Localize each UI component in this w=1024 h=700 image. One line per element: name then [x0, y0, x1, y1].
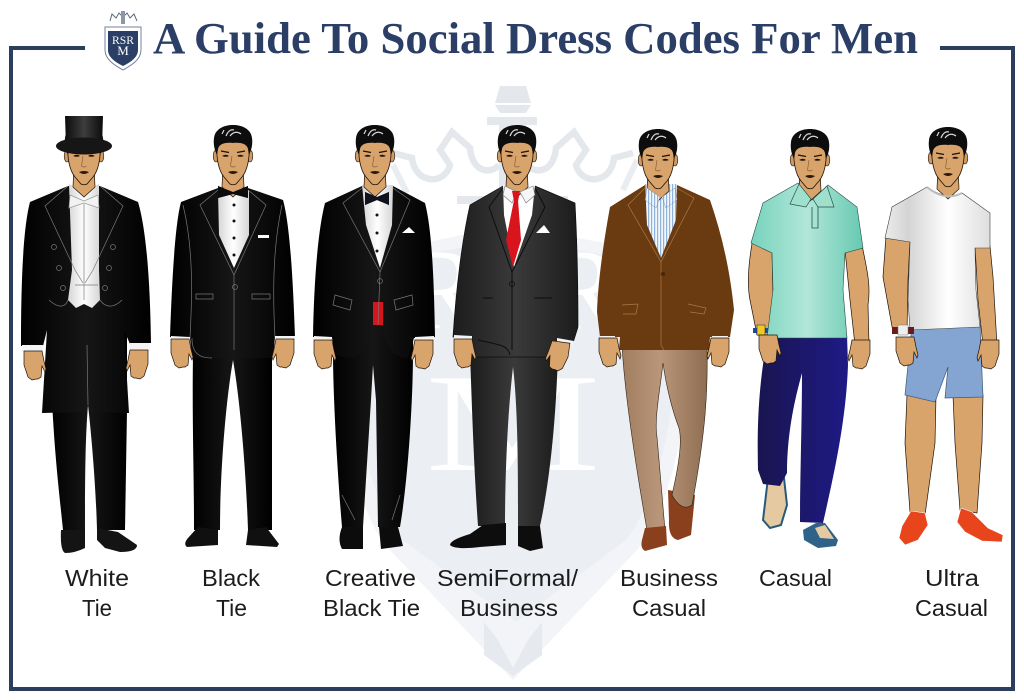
label: business casual: Casual [632, 595, 706, 621]
figure: ultra casual [883, 127, 1003, 545]
trousers [470, 352, 558, 526]
shoes [450, 523, 543, 551]
figure: casual [748, 129, 870, 548]
figure: business casual [597, 129, 734, 551]
label: ultra casual: Casual [915, 595, 988, 621]
head [790, 129, 830, 201]
shirt [503, 185, 535, 267]
cuffs [600, 336, 728, 339]
watch [753, 325, 768, 335]
title: A Guide To Social Dress Codes For Men [153, 14, 918, 63]
trousers [333, 318, 413, 527]
cuffs [314, 336, 434, 340]
head [64, 125, 104, 197]
pocket square [258, 235, 269, 238]
figure: white tie [21, 116, 151, 553]
label: creative black tie: Black Tie [323, 595, 420, 621]
jacket [313, 186, 435, 358]
head [497, 125, 537, 197]
pocket square [402, 227, 415, 233]
polo shirt [751, 183, 863, 338]
lapels and details [622, 188, 706, 350]
label: ultra casual: Ultra [925, 565, 979, 591]
studs [376, 215, 379, 251]
lapels and details [45, 186, 123, 405]
label: semi-formal business [437, 565, 579, 621]
label: black tie: Black [202, 565, 261, 591]
back shoe [668, 490, 695, 540]
head [355, 125, 395, 197]
shirt [218, 190, 249, 268]
lapels and details [333, 188, 413, 520]
hands [599, 338, 729, 367]
icon: RSM crest logo: M [117, 43, 129, 58]
label: business casual [620, 565, 718, 621]
label: black tie [202, 565, 261, 621]
t-shirt [885, 187, 990, 330]
shoes [899, 508, 1003, 545]
placket [812, 205, 818, 228]
label: semi-formal business: SemiFormal/ [437, 565, 579, 591]
hands [314, 340, 433, 369]
watch [892, 325, 914, 335]
white bow tie [69, 195, 99, 208]
collar [503, 186, 535, 203]
red cummerbund [373, 302, 383, 325]
shirt [362, 185, 393, 268]
label: ultra casual [915, 565, 988, 621]
bow tie [218, 186, 248, 198]
cuffs [171, 336, 295, 340]
tailcoat [21, 186, 151, 413]
watermark: shield crest: RSR [404, 226, 622, 353]
blazer [597, 185, 734, 350]
red tie [506, 192, 521, 267]
label: casual: Casual [759, 565, 832, 591]
trousers [622, 345, 707, 530]
hands [454, 339, 570, 372]
head [928, 127, 968, 199]
front shoe [641, 526, 667, 551]
label: black tie: Tie [216, 595, 247, 621]
lapels and details [183, 190, 282, 358]
shoes [185, 527, 279, 547]
hands [896, 337, 999, 369]
t-shirt neckband [927, 187, 962, 196]
shoes [340, 527, 403, 549]
figure: creative black tie [313, 125, 435, 549]
shirt collar overlay [645, 188, 677, 208]
figure: black tie [170, 125, 295, 547]
lapels and details [478, 188, 552, 355]
hands [24, 350, 148, 380]
head [638, 129, 678, 201]
arms [883, 236, 997, 345]
label: white tie: White [65, 565, 129, 591]
bow tie overlay [365, 192, 389, 205]
label: white tie: Tie [82, 595, 112, 621]
jacket [170, 188, 295, 358]
icon: RSM crest logo [105, 11, 141, 70]
watermark: shield crest: M [426, 346, 600, 501]
hands [171, 339, 294, 368]
shorts [905, 325, 983, 402]
label: semi-formal business: Business [460, 595, 558, 621]
legs [905, 395, 983, 515]
jeans [758, 335, 848, 523]
shirt and waistcoat [68, 184, 100, 308]
figure: semi-formal business [450, 125, 578, 551]
icon: RSM crest logo: RSR [112, 33, 134, 47]
tie knot overlay [512, 191, 520, 201]
bow tie overlay [218, 186, 248, 198]
hands [759, 335, 870, 369]
pocket square [536, 225, 550, 233]
arms [748, 238, 869, 345]
top hat [56, 116, 112, 154]
label: creative black tie [323, 565, 420, 621]
cuffs [454, 335, 574, 345]
cuffs [22, 343, 150, 352]
trousers [193, 355, 272, 530]
shoes [763, 478, 787, 528]
bow tie [365, 192, 389, 205]
shirt studs [232, 205, 236, 255]
jacket [453, 186, 578, 357]
label: business casual: Business [620, 565, 718, 591]
label: creative black tie: Creative [325, 565, 416, 591]
head [213, 125, 253, 197]
striped shirt [645, 184, 677, 258]
shoes [61, 528, 137, 553]
trousers [50, 310, 127, 530]
watermark: shield crest [337, 86, 690, 680]
polo collar overlay [790, 184, 834, 207]
waistcoat buttons [52, 244, 116, 290]
label: white tie [65, 565, 129, 621]
